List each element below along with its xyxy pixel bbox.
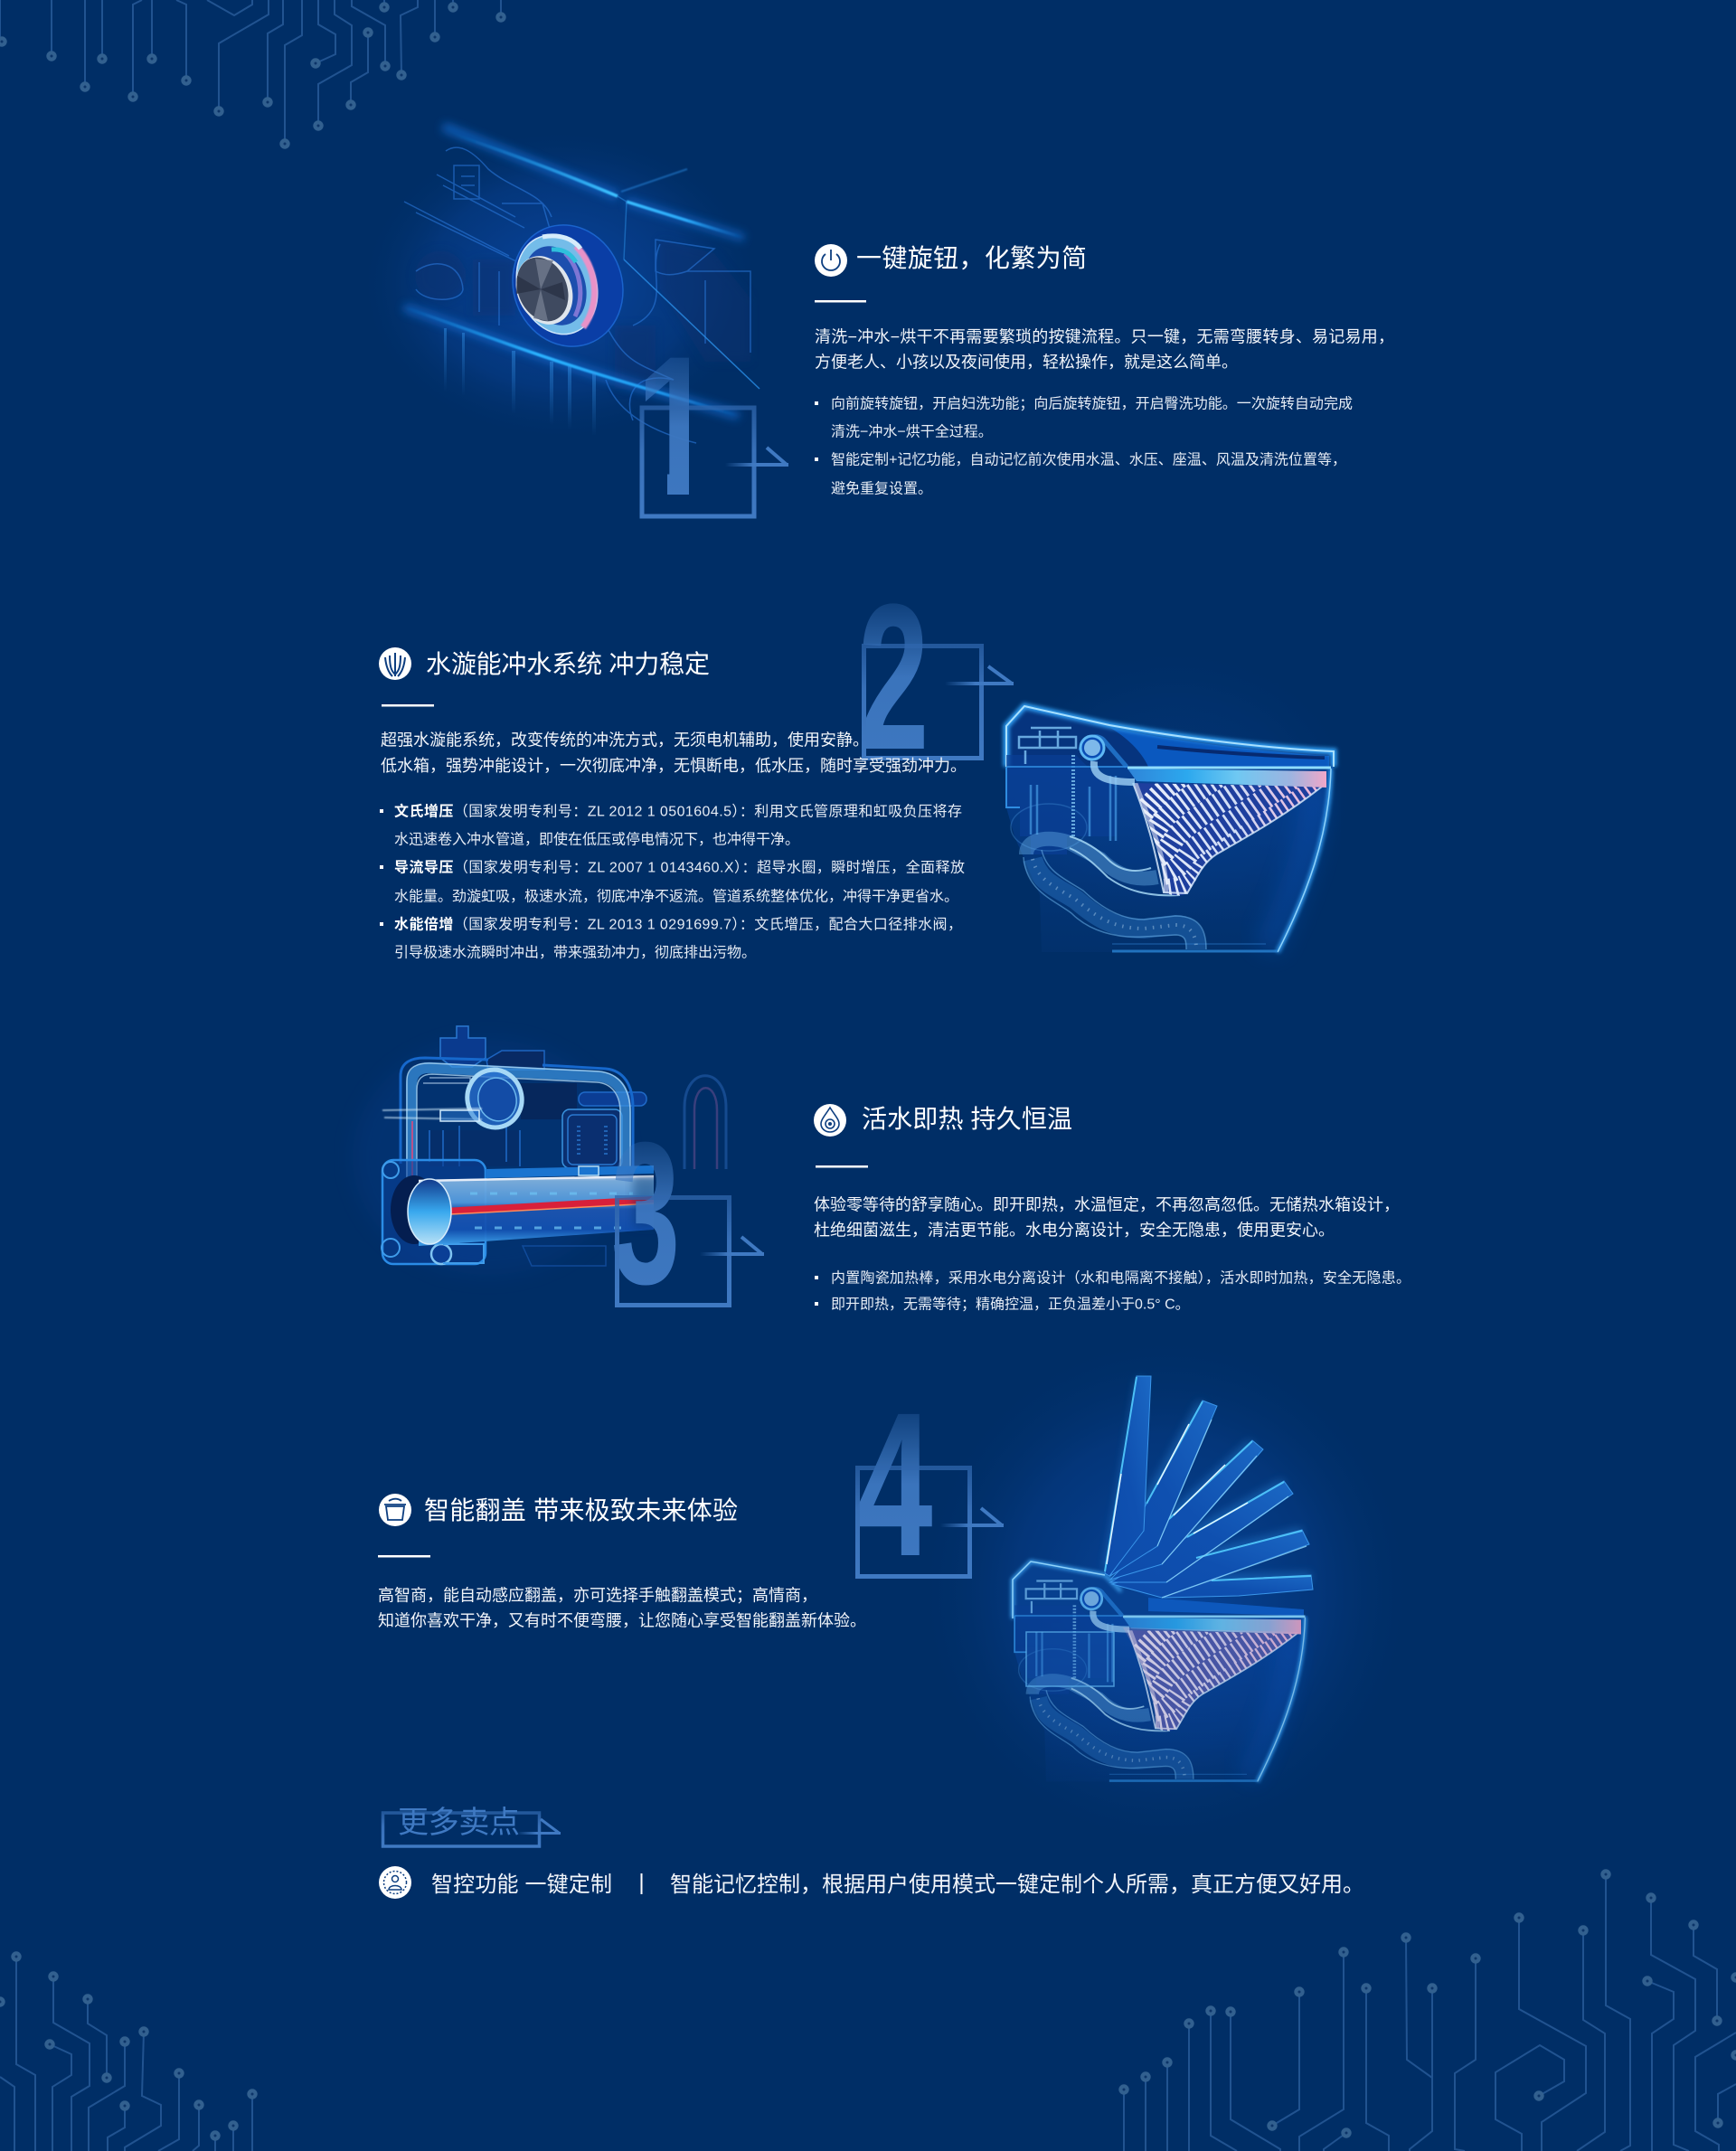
body text: 体验零等待的舒享随心。即开即热，水温恒定，不再忽高忽低。无储热水箱设计，: [814, 1195, 1400, 1213]
icon: person in ring: [379, 1866, 411, 1899]
heading: 一键旋钮，化繁为简: [856, 244, 1087, 272]
bullet list: 避免重复设置。: [831, 481, 932, 497]
icon: whirl trident: [379, 647, 411, 680]
body text: 方便老人、小孩以及夜间使用，轻松操作，就是这么简单。: [815, 353, 1238, 371]
bullet list: 清洗−冲水−烘干全过程。: [831, 423, 993, 439]
panel: whirlpool flush: [379, 561, 1370, 960]
accent line: [382, 704, 434, 707]
accent line: [815, 300, 866, 302]
number 4 with frame and arrow: [856, 1369, 1004, 1599]
accent line: [816, 1165, 868, 1168]
number 2 with frame and arrow: [858, 561, 1014, 793]
panel: more selling points: [379, 1806, 1364, 1899]
feature name: 智控功能 一键定制: [431, 1873, 612, 1897]
bullet list: 导流导压（国家发明专利号：ZL 2007 1 0143460.X）：超导水圈，瞬时增压，全面释放: [394, 859, 965, 875]
tag: more selling points: [383, 1806, 561, 1846]
number 3 with frame and arrow: [611, 1101, 764, 1326]
body text: 低水箱，强势冲能设计，一次彻底冲净，无惧断电，低水压，随时享受强劲冲力。: [381, 757, 967, 775]
body text: 超强水漩能系统，改变传统的冲洗方式，无须电机辅助，使用安静。: [381, 731, 869, 749]
bullet list: [815, 1269, 1410, 1313]
body text: [815, 327, 1394, 371]
number 1 with frame and arrow: [640, 358, 788, 519]
body text: 知道你喜欢干净，又有时不便弯腰，让您随心享受智能翻盖新体验。: [378, 1611, 866, 1629]
bullet list: 水迅速卷入冲水管道，即使在低压或停电情况下，也冲得干净。: [394, 832, 799, 848]
number 2 with frame and arrow: 2: [858, 561, 929, 793]
number 3 with frame and arrow: 3: [611, 1101, 680, 1326]
circuit pattern: bottom right: [1120, 1871, 1736, 2151]
separator: [640, 1873, 642, 1894]
bullet list: 水能量。劲漩虹吸，极速水流，彻底冲净不返流。管道系统整体优化，冲得干净更省水。: [394, 888, 958, 904]
heading: 水漩能冲水系统 冲力稳定: [426, 650, 710, 678]
panel: one-touch knob: [357, 127, 1394, 537]
bullet list: [380, 803, 965, 960]
bullet list: 即开即热，无需等待；精确控温，正负温差小于0.5° C。: [831, 1297, 1190, 1313]
bullet list: [815, 396, 1353, 497]
illustration: glowing knob panel: [357, 127, 764, 443]
number 1 with frame and arrow: 1: [636, 315, 716, 537]
heading: 智能翻盖 带来极致未来体验: [424, 1496, 738, 1524]
tag: more selling points: 更多卖点: [398, 1806, 520, 1840]
icon: power: [815, 244, 847, 277]
bullet list: 智能定制+记忆功能，自动记忆前次使用水温、水压、座温、风温及清洗位置等，: [831, 452, 1346, 468]
illustration: toilet cross-section: [981, 637, 1370, 954]
bullet list: 文氏增压（国家发明专利号：ZL 2012 1 0501604.5）：利用文氏管原理和虹吸负压将存: [394, 803, 962, 819]
number 4 with frame and arrow: 4: [856, 1369, 933, 1599]
illustration: toilet with fanned lids: [913, 1329, 1420, 1854]
bullet list: 引导极速水流瞬时冲出，带来强劲冲力，彻底排出污物。: [394, 944, 756, 960]
body text: 高智商，能自动感应翻盖，亦可选择手触翻盖模式；高情商，: [378, 1586, 817, 1604]
illustration: heater module: [353, 1026, 726, 1275]
body text: 清洗−冲水−烘干不再需要繁琐的按键流程。只一键，无需弯腰转身、易记易用，: [815, 327, 1394, 345]
circuit pattern: top left: [0, 0, 505, 147]
icon: water drop: [814, 1104, 846, 1137]
heading: 活水即热 持久恒温: [862, 1105, 1072, 1133]
icon: lid pot: [379, 1494, 411, 1526]
body text: [814, 1195, 1400, 1239]
panel: smart flip lid: [378, 1329, 1420, 1854]
bullet list: 向前旋转旋钮，开启妇洗功能；向后旋转旋钮，开启臀洗功能。一次旋转自动完成: [831, 396, 1353, 412]
panel: instant heating: [353, 1026, 1410, 1326]
bullet list: 内置陶瓷加热棒，采用水电分离设计（水和电隔离不接触），活水即时加热，安全无隐患。: [831, 1269, 1410, 1286]
circuit pattern: bottom left: [0, 1953, 256, 2151]
bullet list: 水能倍增（国家发明专利号：ZL 2013 1 0291699.7）：文氏增压，配合大口径排水阀，: [394, 915, 962, 933]
body text: [381, 731, 967, 775]
feature description: 智能记忆控制，根据用户使用模式一键定制个人所需，真正方便又好用。: [670, 1873, 1364, 1897]
body text: [378, 1586, 866, 1629]
body text: 杜绝细菌滋生，清洁更节能。水电分离设计，安全无隐患，使用更安心。: [814, 1221, 1335, 1239]
accent line: [378, 1555, 430, 1557]
